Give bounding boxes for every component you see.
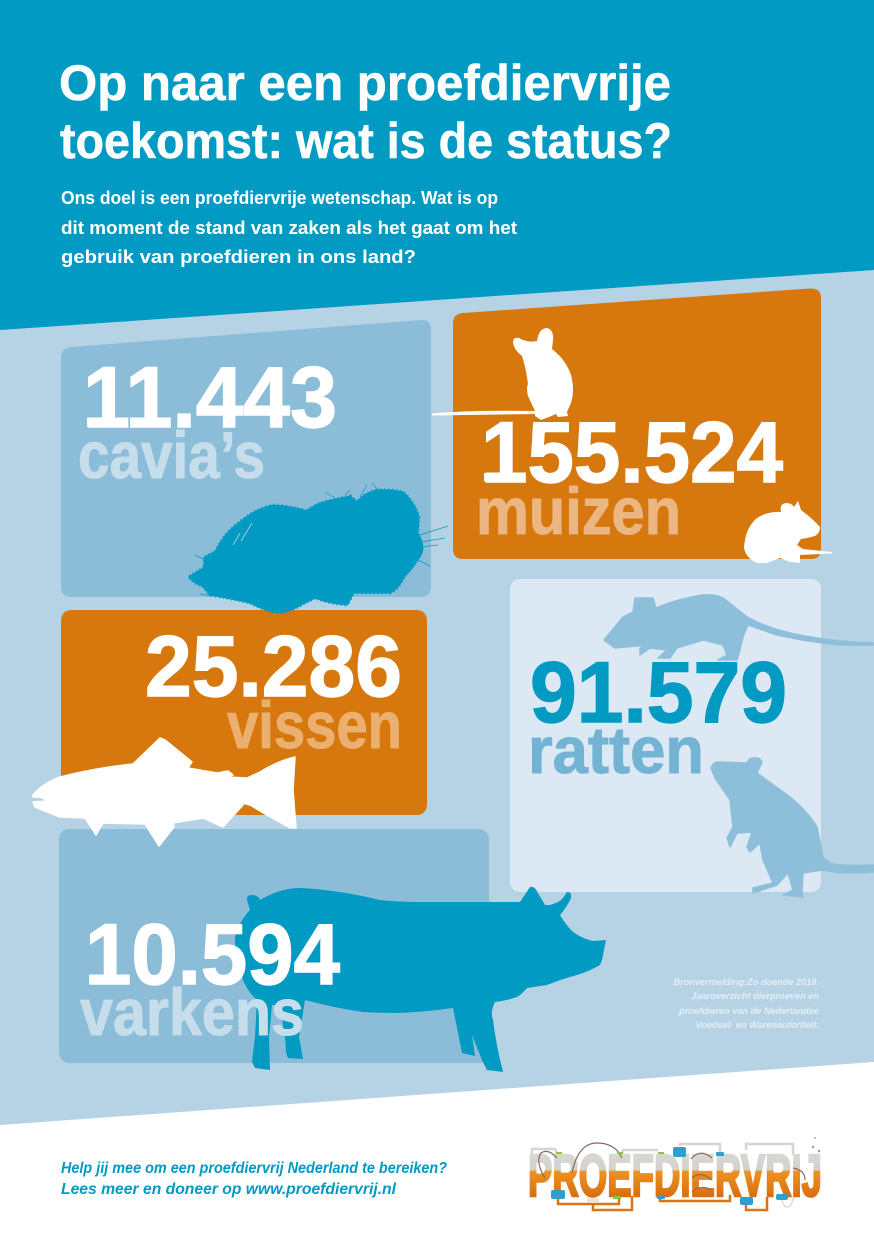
panel: ratten xyxy=(510,579,821,892)
icon: rat standing xyxy=(711,758,874,897)
header background xyxy=(0,0,874,330)
call to action: Help jij mee om een proefdiervrij Nederland te bereiken? xyxy=(61,1160,447,1177)
intro text: Ons doel is een proefdiervrije wetenschap. Wat is op xyxy=(61,188,498,208)
icon: guinea pig xyxy=(190,483,448,612)
call to action xyxy=(61,1160,447,1198)
icon: mouse sitting xyxy=(432,328,573,420)
intro text: dit moment de stand van zaken als het gaat om het xyxy=(61,218,517,238)
panel: varkens xyxy=(59,829,489,1063)
cavia label: cavia’s xyxy=(78,418,265,492)
number: muizen: 155.524 xyxy=(481,405,783,501)
panel: vissen xyxy=(61,610,427,815)
varkens label: varkens xyxy=(80,975,304,1049)
panel: muizen xyxy=(453,288,821,559)
number: cavia's: 11.443 xyxy=(83,350,337,446)
icon: mouse crouching xyxy=(744,501,832,563)
panel: cavia's xyxy=(61,320,431,597)
vissen label: vissen xyxy=(227,688,402,762)
intro text xyxy=(61,188,517,267)
intro text: gebruik van proefdieren in ons land? xyxy=(61,247,416,267)
number: varkens: 10.594 xyxy=(85,907,340,1003)
ratten label: ratten xyxy=(528,713,704,787)
logo valves xyxy=(551,1147,788,1205)
title xyxy=(59,55,672,169)
number: vissen: 25.286 xyxy=(145,619,402,715)
number: ratten: 91.579 xyxy=(530,645,787,741)
icon: fish xyxy=(33,738,296,846)
source note: Voedsel- en Warenautoriteit. xyxy=(695,1020,819,1030)
icon: rat walking xyxy=(604,595,874,660)
muizen label: muizen xyxy=(476,474,681,548)
title: Op naar een proefdiervrije xyxy=(59,55,671,111)
icon: pig xyxy=(235,887,606,1072)
logo fittings and bubbles xyxy=(556,1137,820,1202)
title: toekomst: wat is de status? xyxy=(60,113,672,169)
call to action: Lees meer en doneer op www.proefdiervrij.nl xyxy=(61,1181,397,1198)
source note: Jaaroverzicht dierproeven en xyxy=(691,991,819,1001)
source note: Bronvermelding:Zo doende 2018. xyxy=(674,977,819,987)
footer background xyxy=(0,1062,874,1240)
source note xyxy=(674,977,819,1030)
source note: proefdieren van de Nederlandse xyxy=(678,1006,819,1016)
